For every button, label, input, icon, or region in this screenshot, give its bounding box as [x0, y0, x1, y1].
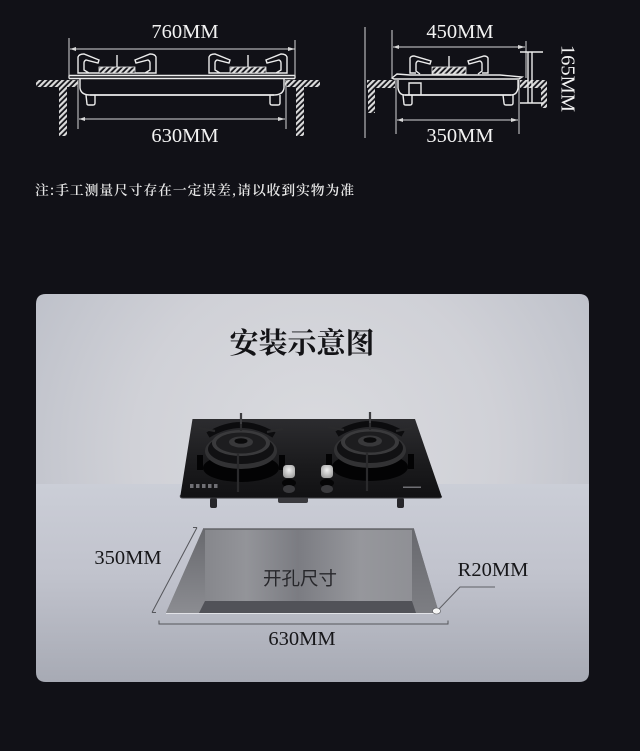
panel background	[36, 294, 589, 682]
heading: 安装示意图	[229, 321, 375, 362]
left burner	[197, 413, 285, 492]
cutout label: 开孔尺寸	[263, 565, 337, 591]
dimension: 450MM: 450MM	[426, 21, 494, 43]
cutout hole	[166, 529, 439, 614]
dimension: 350MM: 350MM	[426, 125, 494, 147]
right burner	[326, 412, 414, 491]
glass top	[180, 419, 442, 498]
dimension: 165MM: 165MM	[556, 45, 578, 112]
dimension: hole width 630MM	[159, 620, 448, 650]
dimension: 760MM	[69, 21, 295, 78]
control marks and logo	[190, 484, 421, 488]
hob feet	[210, 497, 404, 508]
hob outline front	[69, 54, 295, 105]
hob product image	[180, 412, 442, 508]
dimension: hole depth 350MM	[94, 528, 197, 612]
diagram: side view dimensions	[365, 21, 578, 147]
note text: 注:手工测量尺寸存在一定误差,请以收到实物为准	[35, 179, 354, 199]
wall and cabinet section	[365, 27, 547, 138]
corner radius callout	[432, 559, 528, 614]
panel: installation diagram	[36, 294, 589, 682]
dimension: hole width 630MM: 630MM	[268, 628, 336, 650]
knobs	[282, 465, 334, 493]
dimension: 350MM	[396, 80, 519, 147]
dimension: 630MM: 630MM	[151, 125, 219, 147]
dimension: 165MM	[520, 45, 578, 112]
dimension: 760MM: 760MM	[151, 21, 219, 43]
corner radius callout: R20MM	[458, 559, 528, 581]
counter and cabinet section	[36, 80, 320, 136]
diagram: front view dimensions	[36, 21, 320, 147]
dimension: 450MM	[392, 21, 526, 78]
hob outline side	[392, 56, 522, 105]
dimension: 630MM	[78, 80, 286, 147]
dimension: hole depth 350MM: 350MM	[94, 547, 162, 569]
